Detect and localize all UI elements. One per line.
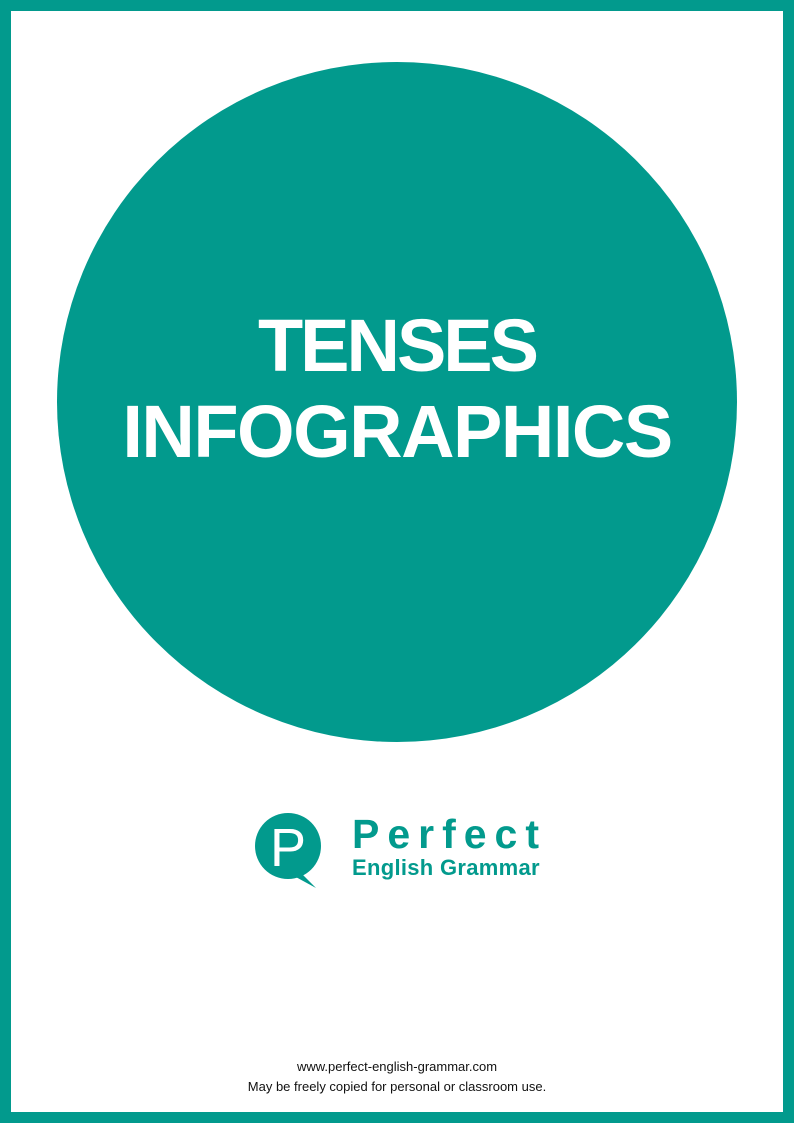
icon: speech bubble P: [255, 813, 321, 888]
title: TENSES: [258, 304, 536, 387]
title: INFOGRAPHICS: [122, 390, 672, 473]
icon: speech bubble P: P: [270, 818, 306, 878]
footer: www.perfect-english-grammar.com: [297, 1059, 497, 1074]
footer: May be freely copied for personal or classroom use.: [248, 1079, 546, 1094]
title: [122, 304, 672, 473]
logo: English Grammar: [352, 855, 540, 880]
circle background: [57, 62, 737, 742]
logo text: Perfect: [352, 811, 547, 857]
footer: [248, 1059, 546, 1094]
logo: [255, 811, 547, 888]
